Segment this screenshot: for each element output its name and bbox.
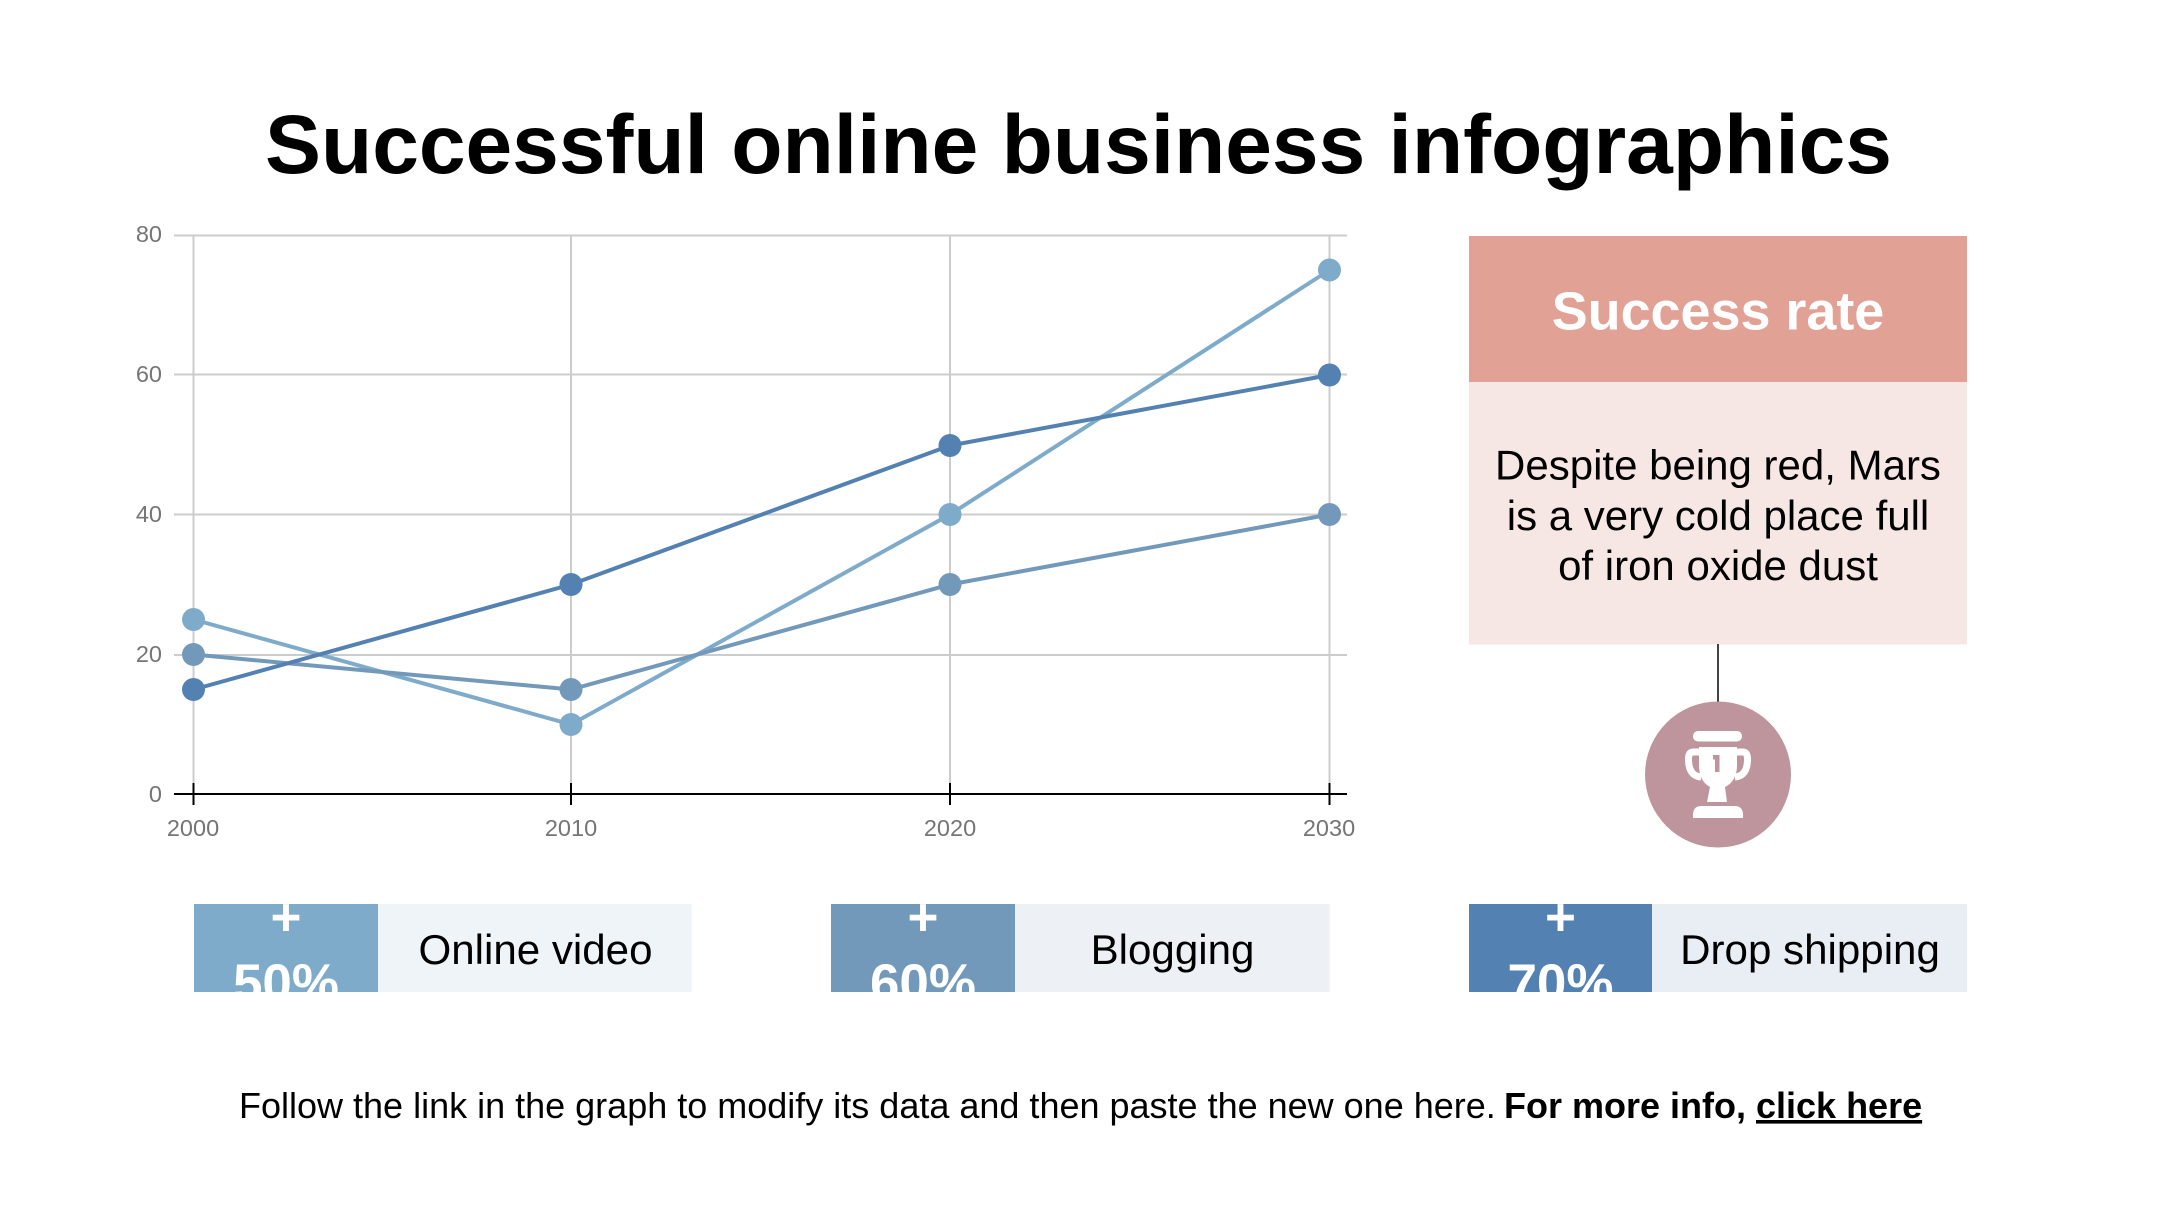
x axis <box>174 783 1347 805</box>
line chart <box>136 221 1355 841</box>
success rate body text: of iron oxide dust <box>1558 542 1878 589</box>
stat: drop shipping: Drop shipping <box>1680 926 1940 973</box>
stat: blogging: + <box>908 888 938 947</box>
stat: blogging <box>831 904 1330 992</box>
title: Successful online business infographics <box>265 97 1892 191</box>
stat: online video: Online video <box>418 926 653 973</box>
connector line <box>1717 644 1719 705</box>
x axis labels: 2020 <box>924 815 976 841</box>
success rate body text: Despite being red, Mars <box>1495 442 1941 488</box>
panel: success rate <box>1469 236 1967 644</box>
y axis labels <box>136 221 162 807</box>
footer note: Follow the link in the graph to modify its data and then paste the new one here. <box>239 1085 1496 1126</box>
series: blogging <box>182 503 1341 701</box>
success rate body text <box>1469 382 1967 644</box>
y axis labels: 40 <box>136 501 162 527</box>
series: online video <box>182 258 1341 736</box>
success rate body text: is a very cold place full <box>1507 492 1929 539</box>
x axis labels: 2010 <box>545 815 597 841</box>
series: drop shipping <box>182 364 1341 701</box>
x axis labels: 2000 <box>167 815 219 841</box>
y axis labels: 60 <box>136 361 162 387</box>
success rate header <box>1469 236 1967 382</box>
success rate header: Success rate <box>1552 282 1884 342</box>
stat: blogging: Blogging <box>1091 926 1254 973</box>
icon: trophy in circle <box>1645 702 1791 848</box>
y axis labels: 80 <box>136 221 162 247</box>
stat: online video <box>194 904 692 992</box>
stat: online video: 50% <box>233 954 339 1013</box>
stat: blogging: 60% <box>870 954 976 1013</box>
x axis labels <box>167 815 1355 841</box>
stat: online video: + <box>271 888 301 947</box>
stat: drop shipping: 70% <box>1507 954 1614 1013</box>
footer note: For more info, click here <box>1504 1085 1922 1126</box>
x axis labels: 2030 <box>1303 815 1355 841</box>
stat: drop shipping: + <box>1545 888 1576 947</box>
y axis labels: 0 <box>149 781 162 807</box>
stat: drop shipping <box>1469 904 1967 992</box>
infographic canvas <box>136 112 1967 1126</box>
y axis labels: 20 <box>136 641 162 667</box>
